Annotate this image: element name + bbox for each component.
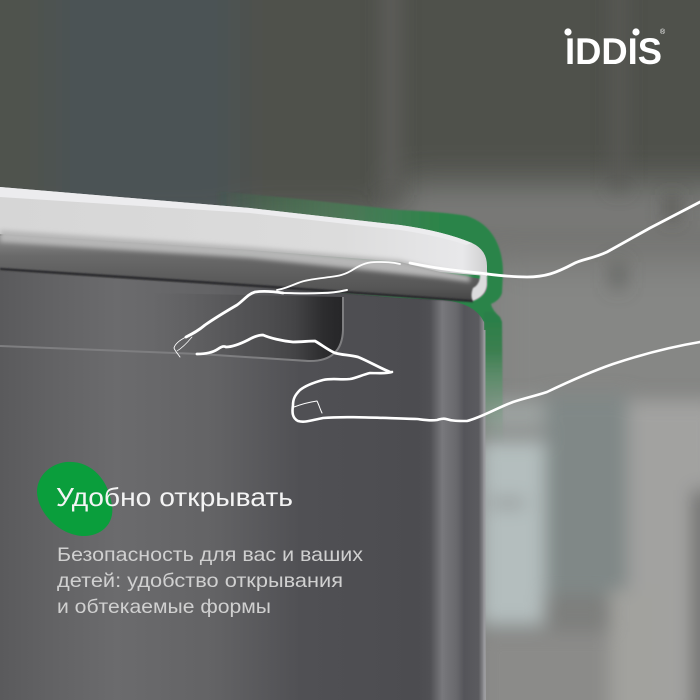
wrist upper line [410, 202, 700, 277]
heading: Удобно открывать [56, 482, 293, 512]
body text: Безопасность для вас и ваших [57, 544, 363, 566]
fingertip [174, 337, 186, 357]
logo: ® [660, 28, 666, 36]
hand outline [174, 202, 700, 422]
green highlight behind lid and body [242, 195, 504, 424]
toilet lid [0, 187, 487, 301]
body text: и обтекаемые формы [57, 596, 271, 618]
thumb [293, 342, 700, 422]
logo: IDDIS [565, 31, 662, 72]
green blob accent [37, 462, 112, 536]
toilet body [0, 268, 486, 700]
body text [57, 544, 363, 618]
recess seam [0, 297, 343, 361]
handle recess [214, 294, 342, 360]
index finger underside [197, 335, 390, 372]
lid shadow line [0, 269, 473, 301]
fingernail [177, 337, 192, 351]
index finger top [186, 291, 283, 337]
thumb nail [294, 401, 322, 413]
toilet lid underside [0, 236, 487, 301]
body text: детей: удобство открывания [57, 570, 343, 592]
knuckle line [277, 262, 400, 290]
